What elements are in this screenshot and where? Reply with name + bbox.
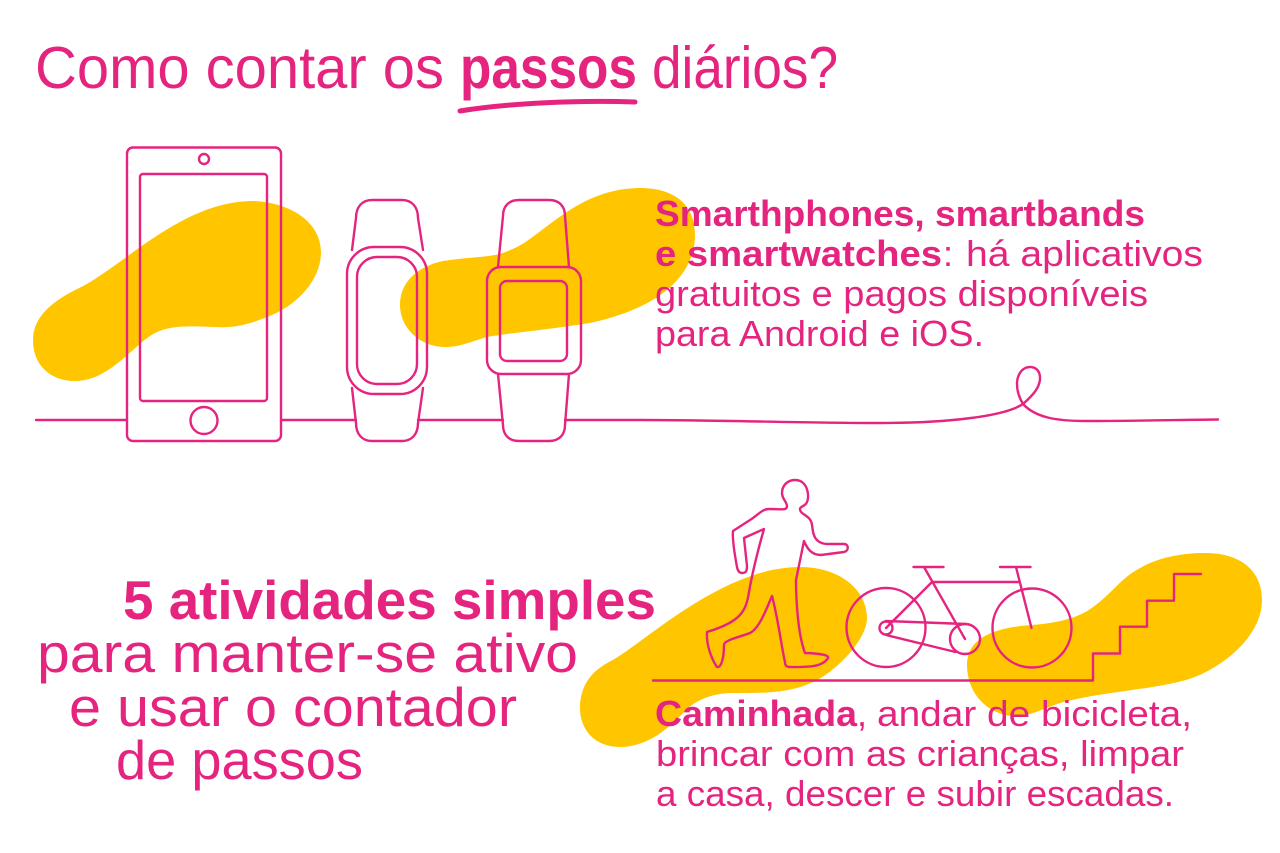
activities heading: para manter-se ativo: [37, 622, 578, 684]
title: [35, 35, 838, 101]
timeline thread with loop: [36, 367, 1218, 423]
yellow footprint blob: stairs: [967, 553, 1262, 716]
ground line and stairs: [653, 574, 1201, 680]
icon: smartphone: [127, 148, 281, 441]
activities heading: 5 atividades simples: [123, 569, 656, 631]
title: Como contar os: [35, 35, 444, 101]
title: passos: [460, 35, 637, 101]
activities description text: a casa, descer e subir escadas.: [656, 773, 1174, 814]
title: diários?: [652, 35, 838, 101]
icon: bicycle: [846, 567, 1072, 668]
activities heading: [37, 569, 656, 791]
title underline stroke: [460, 101, 635, 111]
activities heading: de passos: [116, 729, 363, 791]
devices description text: há aplicativos: [966, 233, 1203, 274]
activities description text: Caminhada: [655, 693, 858, 734]
devices description text: para Android e iOS.: [655, 313, 984, 354]
devices description text: gratuitos e pagos disponíveis: [655, 273, 1148, 314]
devices description text: e smartwatches: [655, 233, 942, 274]
activities description text: [655, 693, 1192, 814]
icon: smartband: [347, 200, 427, 441]
devices description text: [655, 193, 1203, 354]
icon: walking person: [707, 480, 848, 667]
yellow footprint blob: phone: [33, 201, 321, 381]
yellow footprint blob: watch: [400, 188, 695, 347]
devices description text: Smarthphones, smartbands: [655, 193, 1145, 234]
activities heading: e usar o contador: [69, 676, 517, 738]
activities description text: ,: [857, 693, 867, 734]
yellow footprint blob: walker: [580, 567, 867, 747]
activities description text: brincar com as crianças, limpar: [656, 733, 1184, 774]
devices description text: :: [943, 233, 953, 274]
icon: smartwatch: [487, 200, 581, 441]
activities description text: andar de bicicleta,: [877, 693, 1192, 734]
